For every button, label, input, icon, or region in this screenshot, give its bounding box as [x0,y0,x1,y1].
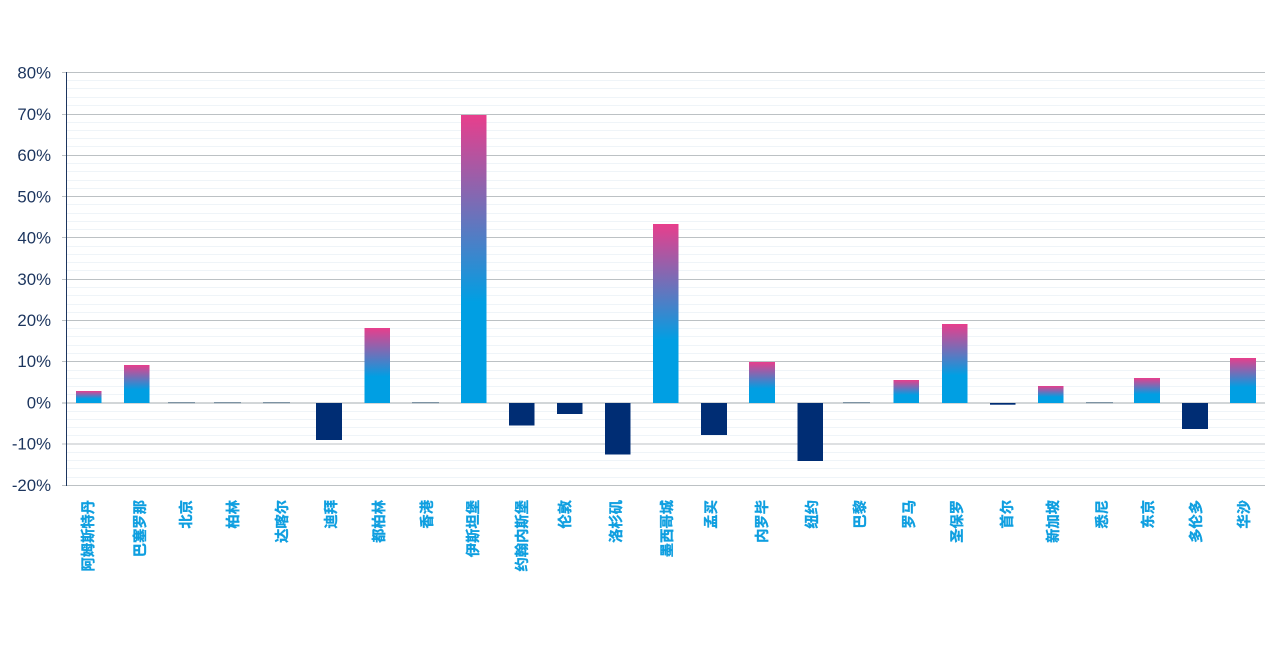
x axis city labels: 纽约 [803,500,821,529]
x axis city labels: 迪拜 [323,500,340,529]
bar: 柏林 [214,402,241,403]
x axis city labels: 东京 [1139,500,1157,529]
bar: 悉尼 [1086,402,1113,403]
bar: 都柏林 [364,328,390,403]
bar: 华沙 [1230,358,1256,403]
zero line [62,402,1265,404]
x axis city labels: 巴黎 [852,500,869,529]
bar: 约翰内斯堡 [509,403,534,426]
bars [76,115,1256,461]
y axis labels: 30% [17,270,51,289]
bar: 洛杉矶 [605,403,630,454]
bar: 多伦多 [1182,403,1208,429]
x axis city labels: 伊斯坦堡 [464,500,482,557]
bar: 阿姆斯特丹 [76,391,102,403]
bar: 巴塞罗那 [124,365,150,403]
bar: 纽约 [798,403,823,461]
y axis labels: 20% [17,311,51,330]
x axis city labels: 北京 [177,500,195,529]
x axis city labels: 都柏林 [371,499,388,543]
y axis line [66,72,68,486]
x axis city labels: 洛杉矶 [608,500,625,543]
y axis labels: 50% [17,188,51,206]
x axis city labels: 悉尼 [1094,500,1111,529]
y axis labels: 0% [27,394,51,412]
x axis city labels: 首尔 [998,500,1016,529]
x axis city labels: 圣保罗 [949,500,966,543]
x axis city labels: 香港 [418,499,436,529]
bar: 香港 [412,402,439,403]
bar: 伦敦 [557,403,582,414]
bar: 内罗毕 [749,362,775,403]
x axis city labels: 伦敦 [556,499,574,529]
bar: 东京 [1134,378,1160,403]
bar: 罗马 [894,380,919,403]
bar: 新加坡 [1038,386,1064,403]
x axis city labels: 巴塞罗那 [131,500,149,557]
bar: 迪拜 [316,403,342,440]
y axis labels: 70% [17,105,51,124]
y axis labels: 60% [17,146,51,165]
y axis labels: 10% [17,352,51,371]
x axis city labels: 阿姆斯特丹 [79,500,97,571]
x axis city labels: 多伦多 [1187,500,1205,543]
x axis city labels: 内罗毕 [754,500,771,543]
y axis labels: -20% [12,476,51,495]
x axis city labels: 达喀尔 [273,500,291,543]
x axis city labels: 约翰内斯堡 [513,500,531,571]
y axis labels [12,64,51,495]
bar: 圣保罗 [942,324,968,403]
bar: 北京 [168,402,195,403]
x axis city labels: 华沙 [1235,500,1253,529]
bar: 孟买 [701,403,727,435]
bar: 墨西哥城 [653,224,678,403]
bar: 首尔 [990,403,1016,405]
x axis city labels [79,499,1253,571]
x axis city labels: 新加坡 [1044,500,1062,543]
bar: 伊斯坦堡 [461,115,486,403]
x axis city labels: 柏林 [225,499,242,529]
x axis city labels: 罗马 [901,500,918,529]
bar: 达喀尔 [263,402,290,403]
y axis labels: 40% [17,228,51,248]
y axis labels: -10% [12,434,51,454]
x axis city labels: 孟买 [703,500,720,529]
y axis labels: 80% [17,64,51,82]
x axis city labels: 墨西哥城 [658,499,676,557]
bar: 巴黎 [843,402,870,403]
